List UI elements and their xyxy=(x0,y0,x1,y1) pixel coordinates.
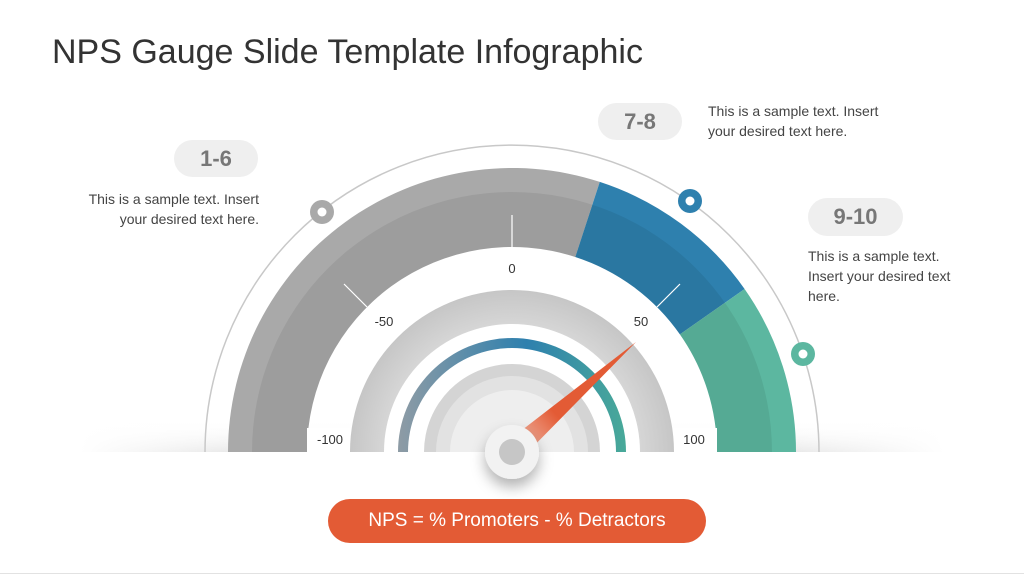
title: NPS Gauge Slide Template Infographic xyxy=(52,33,643,71)
pill: 9-10 xyxy=(808,198,903,236)
ticks xyxy=(344,215,680,307)
pill: 1-6: 1-6 xyxy=(200,146,232,171)
scale labels: -50 xyxy=(375,314,393,329)
marker dots xyxy=(310,189,815,366)
scale labels: 100 xyxy=(683,432,705,447)
text: 7-8: your desired text here. xyxy=(708,123,847,139)
pill: 9-10: 9-10 xyxy=(833,204,878,229)
text: 1-6: This is a sample text. Insert xyxy=(89,191,259,207)
text: 1-6 xyxy=(88,191,259,227)
text: 9-10 xyxy=(808,248,950,304)
scale labels xyxy=(307,261,717,452)
horizon shadow xyxy=(80,420,944,452)
pill: 1-6 xyxy=(174,140,258,177)
text: 9-10: here. xyxy=(808,288,840,304)
pill: 7-8 xyxy=(598,103,682,140)
scale labels: -100 xyxy=(317,432,343,447)
text: 7-8 xyxy=(708,103,878,139)
band: detractors gray xyxy=(228,168,600,452)
formula pill xyxy=(328,499,706,543)
text: 9-10: This is a sample text. xyxy=(808,248,940,264)
text: 9-10: Insert your desired text xyxy=(808,268,950,284)
band: promoters green xyxy=(680,289,796,452)
outer thin arc xyxy=(205,145,819,452)
scale labels: 50 xyxy=(634,314,648,329)
formula pill: NPS = % Promoters - % Detractors xyxy=(368,510,666,531)
pivot xyxy=(485,425,539,479)
text: 7-8: This is a sample text. Insert xyxy=(708,103,878,119)
band: passives blue xyxy=(575,182,745,334)
needle xyxy=(504,342,636,460)
text: 1-6: your desired text here. xyxy=(120,211,259,227)
inner dial xyxy=(350,290,674,452)
pill: 7-8: 7-8 xyxy=(624,109,656,134)
scale labels: 0 xyxy=(508,261,516,276)
